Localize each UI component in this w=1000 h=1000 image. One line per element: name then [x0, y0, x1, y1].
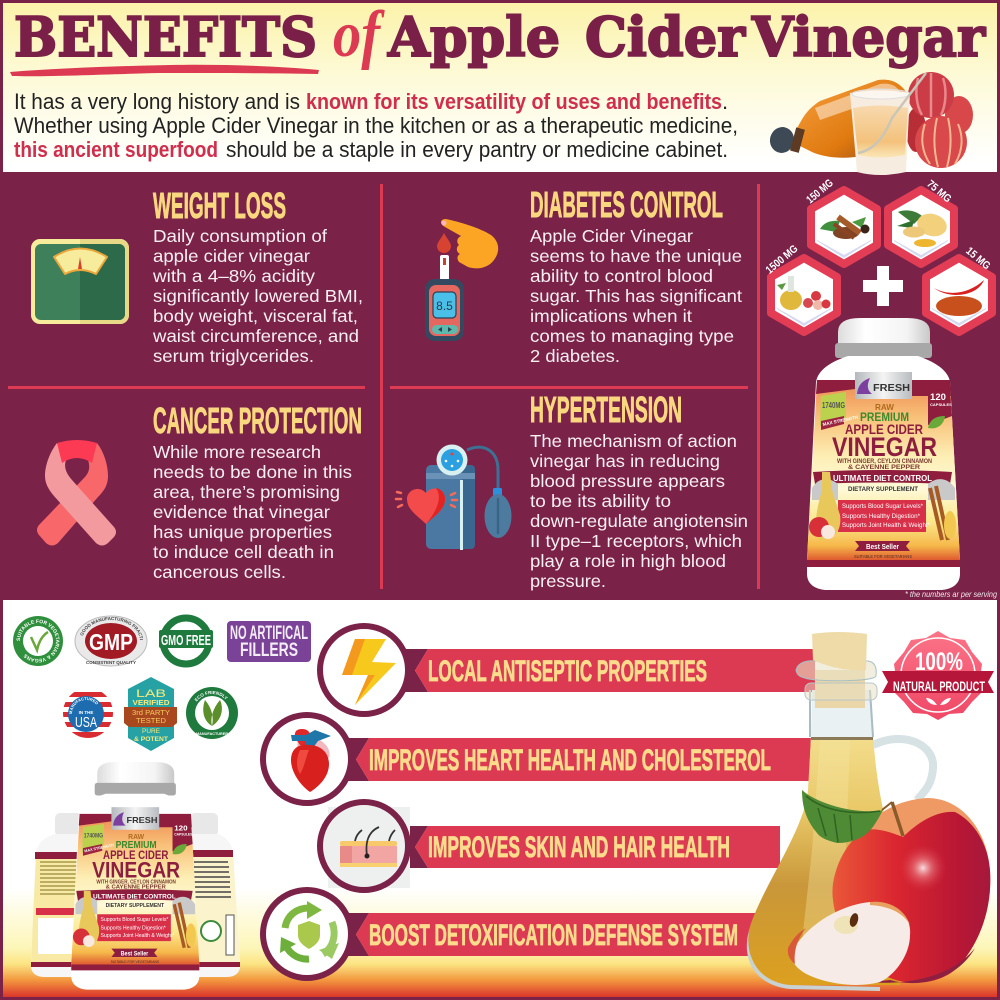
section: diabetes control: comes to managing type: [530, 326, 734, 346]
product bottle: Supports Joint Health & Weight*: [842, 522, 930, 529]
section: weight loss: with a 4–8% acidity: [152, 266, 315, 286]
badge: GMP: GMP: [89, 629, 133, 655]
header background: [0, 0, 1000, 172]
product bottle front: SUITABLE FOR VEGETARIANS: [111, 960, 160, 964]
product bottle front: Supports Joint Health & Weight*: [101, 933, 175, 939]
product bottle front: APPLE CIDER: [103, 849, 169, 862]
ribbon: local antiseptic properties: LOCAL ANTISEPTIC PROPERTIES: [428, 655, 707, 688]
icon: heart in circle: [263, 715, 351, 803]
product bottle front: VINEGAR: [92, 857, 180, 882]
title: Cider: [585, 5, 746, 69]
dosage labels: 15 MG: [963, 245, 993, 272]
product bottle front: MAX STRENGTH: [84, 843, 114, 853]
photo: glass cruet of vinegar: [747, 632, 933, 991]
product bottle: WITH GINGER, CEYLON CINNAMON: [837, 459, 932, 465]
badge: lab verified: TESTED: [136, 718, 166, 725]
product bottle front: CAPSULES: [174, 833, 193, 837]
section: weight loss: apple cider vinegar: [153, 246, 310, 266]
section: weight loss: WEIGHT LOSS: [153, 185, 286, 226]
section: cancer protection: to induce cell death in: [153, 542, 334, 562]
section: hypertension: blood pressure appears: [530, 471, 725, 491]
ingredient hexagon: cinnamon: [811, 190, 877, 264]
section: cancer protection: CANCER PROTECTION: [153, 400, 362, 441]
product bottle: MAX STRENGTH: [822, 415, 858, 427]
title: of: [333, 0, 385, 71]
product bottle: RAW: [875, 402, 895, 412]
section: weight loss: body weight, visceral fat,: [153, 306, 358, 326]
section: cancer protection: evidence that vinegar: [153, 502, 330, 522]
product bottle front: Best Seller: [121, 950, 149, 957]
badge: lab verified: [124, 677, 177, 751]
section: weight loss: waist circumference, and: [152, 326, 359, 346]
section: diabetes control: Apple Cider Vinegar: [530, 226, 693, 246]
badge: GMO free: GMO FREE: [161, 632, 211, 649]
section: hypertension: pressure.: [530, 571, 606, 591]
badge: manufactured in the USA: [63, 692, 113, 738]
badge: manufactured in the USA: USA: [75, 714, 97, 731]
ribbon: skin and hair: IMPROVES SKIN AND HAIR HEALTH: [428, 831, 730, 864]
badge: lab verified: LAB: [136, 688, 166, 700]
product bottle: Supports Blood Sugar Levels*: [842, 503, 923, 510]
badge: suitable for vegetarians: SUITABLE FOR VEGETARIAN & VEGANS: [16, 620, 60, 662]
product bottle front: WITH GINGER, CEYLON CINNAMON: [96, 879, 176, 885]
title: [14, 0, 986, 71]
benefits panel background: [0, 172, 1000, 600]
section: cancer protection: area, there’s promising: [153, 482, 340, 502]
section: cancer protection: has unique properties: [153, 522, 332, 542]
product bottle: [807, 318, 960, 590]
section: hypertension: II type–1 receptors, which: [530, 531, 742, 551]
section: hypertension: down-regulate angiotensin: [530, 511, 748, 531]
ingredient hexagon: ginger: [888, 190, 954, 264]
photo: vinegar bottle, glass and apples: [767, 72, 973, 175]
product bottle: Best Seller: [866, 542, 899, 551]
badge: manufactured in the USA: IN THE: [79, 710, 93, 715]
section: cancer protection: While more research: [153, 442, 321, 462]
photo: red apple: [832, 798, 990, 983]
badge: lab verified: 3rd PARTY: [132, 710, 170, 717]
intro text: this ancient superfood: [14, 137, 218, 162]
plus sign: [863, 266, 903, 306]
badge: lab verified: VERIFIED: [132, 700, 170, 707]
section: cancer protection: cancerous cells.: [153, 562, 286, 582]
ribbon: heart health: [345, 738, 812, 781]
badge: GMP: [74, 616, 148, 666]
section: diabetes control: DIABETES CONTROL: [530, 184, 723, 225]
product bottle: CAPSULES: [930, 402, 952, 407]
icon: glucose meter and finger: [425, 219, 498, 341]
photo: green leaf: [802, 790, 892, 843]
product bottle: APPLE CIDER: [845, 421, 923, 437]
icon: lightning in circle: [320, 626, 408, 714]
product bottle front: RAW: [128, 833, 144, 841]
section: hypertension: HYPERTENSION: [530, 389, 682, 430]
product bottle: & CAYENNE PEPPER: [848, 465, 921, 471]
dosage labels: 1500 MG: [764, 243, 800, 277]
product bottle: DIETARY SUPPLEMENT: [848, 486, 918, 493]
section: weight loss: Daily consumption of: [153, 226, 327, 246]
badge: no artificial fillers: FILLERS: [240, 640, 298, 661]
product bottle front: 1740MG: [84, 832, 103, 839]
badge: no artificial fillers: [227, 621, 311, 662]
ingredient hexagon: cayenne: [926, 258, 992, 332]
section: weight loss: significantly lowered BMI,: [153, 286, 363, 306]
badge: 100% natural product: [882, 631, 994, 720]
badge: eco friendly: ECO FRIENDLY: [194, 690, 228, 702]
badge: no artificial fillers: NO ARTIFICAL: [230, 623, 308, 644]
section: weight loss: [152, 185, 363, 366]
ribbon: detoxification: [345, 913, 760, 956]
icon: blood pressure monitor: [396, 444, 512, 550]
panel dividers: [8, 184, 760, 589]
section: hypertension: The mechanism of action: [530, 431, 737, 451]
title underline brush stroke: [10, 65, 319, 76]
badge: GMO free: [159, 618, 213, 664]
product bottle: VINEGAR: [832, 432, 937, 462]
photo: apple slice: [788, 902, 910, 985]
section: cancer protection: [153, 400, 362, 582]
badge: GMP: CONSISTENT QUALITY: [86, 660, 136, 665]
badge: lab verified: PURE: [142, 729, 160, 735]
product bottle front: ULTIMATE DIET CONTROL: [93, 893, 176, 900]
section: cancer protection: needs to be done in this: [153, 462, 352, 482]
dosage labels: [764, 177, 993, 277]
ribbon: skin and hair: [404, 826, 780, 868]
section: hypertension: [530, 389, 748, 591]
product bottle front: FRESH: [127, 815, 157, 825]
badge: eco friendly: [186, 687, 238, 739]
badge: GMP: GOOD MANUFACTURING PRACTICE: [80, 616, 143, 640]
section: diabetes control: sugar. This has significant: [530, 286, 742, 306]
product bottle front: PREMIUM: [116, 840, 157, 851]
product bottle: Supports Healthy Digestion*: [842, 513, 920, 520]
ribbon: local antiseptic properties: [404, 649, 815, 692]
product bottle front: Supports Blood Sugar Levels*: [101, 917, 169, 923]
product bottle: SUITABLE FOR VEGETARIANS: [854, 554, 912, 559]
icon: weighing scale: [31, 239, 129, 324]
ribbon: detoxification: BOOST DETOXIFICATION DEFENSE SYSTEM: [369, 919, 738, 952]
badge: 100% natural product: 100%: [915, 648, 963, 676]
section: weight loss: serum triglycerides.: [153, 346, 314, 366]
section: diabetes control: 2 diabetes.: [530, 346, 620, 366]
intro text: It has a very long history and is: [14, 89, 300, 114]
dosage labels: 150 MG: [804, 177, 836, 206]
section: diabetes control: seems to have the unique: [530, 246, 742, 266]
side bottle left: [31, 813, 83, 977]
section: diabetes control: implications when it: [530, 306, 692, 326]
section: diabetes control: [530, 184, 742, 366]
product bottle front: & CAYENNE PEPPER: [106, 884, 166, 890]
section: hypertension: play a role in high blood: [530, 551, 726, 571]
intro text: Whether using Apple Cider Vinegar in the kitchen or as a therapeutic medicine,: [14, 113, 738, 138]
product bottle: 120: [930, 392, 946, 402]
ingredient hexagon: vinegar and apples: [771, 258, 837, 332]
intro text: .: [722, 89, 728, 114]
badge: lab verified: & POTENT: [134, 737, 168, 743]
badge: eco friendly: MANUFACTURER: [196, 732, 228, 736]
product bottle: PREMIUM: [860, 410, 909, 424]
lower section background: [0, 600, 1000, 1000]
section: hypertension: to be its ability to: [530, 491, 671, 511]
product bottle: ULTIMATE DIET CONTROL: [833, 474, 932, 483]
title: BENEFITS: [14, 5, 317, 69]
badge: manufactured in the USA: MANUFACTURED: [69, 697, 98, 714]
section: hypertension: vinegar has in reducing: [530, 451, 720, 471]
icon: awareness ribbon: [37, 440, 116, 546]
section: diabetes control: ability to control blood: [530, 266, 713, 286]
product bottle: FRESH: [873, 383, 910, 394]
intro text: should be a staple in every pantry or medicine cabinet.: [226, 137, 728, 162]
product bottle: 1740MG: [822, 401, 845, 410]
intro text: known for its versatility of uses and benefits: [306, 89, 722, 114]
product bottle front: Supports Healthy Digestion*: [101, 925, 167, 931]
title: Vinegar: [751, 5, 986, 69]
icon: skin and hair in circle: [320, 802, 410, 890]
product bottle front: DIETARY SUPPLEMENT: [106, 903, 165, 909]
intro text: [14, 89, 738, 162]
icon: recycling shield in circle: [263, 890, 351, 978]
product bottle front: 120: [174, 824, 188, 833]
product bottle front: [71, 762, 199, 990]
dosage labels: 75 MG: [924, 178, 954, 205]
title: Apple: [387, 5, 560, 69]
side bottle right: [190, 813, 240, 977]
icon: glucose meter and finger: 8.5: [436, 299, 453, 313]
